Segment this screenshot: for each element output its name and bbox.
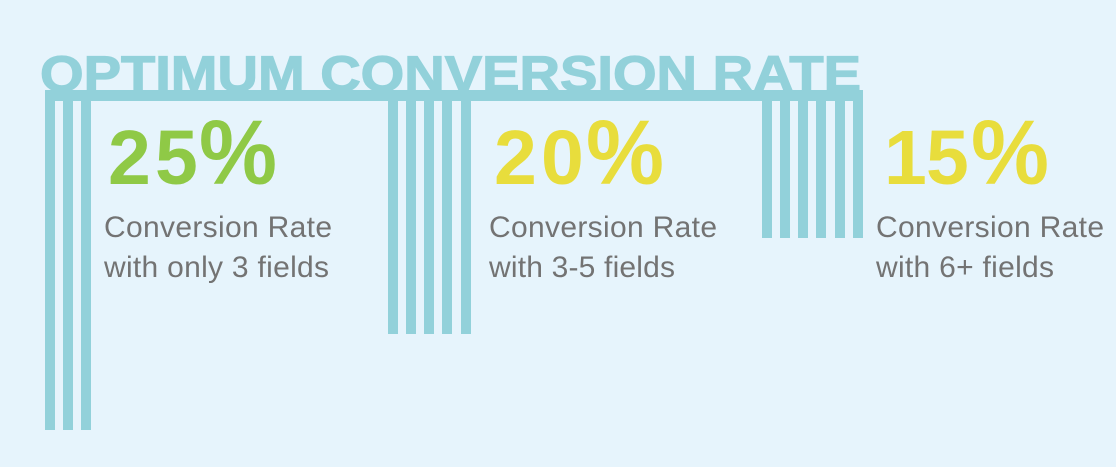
caption: 6+ fields [875, 211, 1104, 284]
bars: 3 fields [45, 100, 91, 430]
stat: 15%: % [971, 102, 1049, 204]
caption: 6+ fields: Conversion Rate [876, 211, 1104, 244]
caption: 6+ fields: with 6+ fields [875, 251, 1054, 284]
caption: 3 fields: with only 3 fields [103, 251, 329, 284]
stat: 25%: % [199, 102, 277, 204]
stat: 25%: 25 [108, 115, 198, 201]
caption: 3-5 fields [488, 211, 717, 284]
stat: 15% [884, 102, 1049, 204]
stat: 20%: 20 [494, 115, 584, 201]
caption: 3 fields: Conversion Rate [104, 211, 332, 244]
stat: 20% [494, 102, 664, 204]
stat: 20%: % [586, 102, 664, 204]
caption: 3 fields [103, 211, 332, 284]
stat: 25% [108, 102, 277, 204]
title: OPTIMUM CONVERSION RATE [40, 46, 861, 102]
bars: 6+ fields [762, 100, 863, 238]
stat: 15%: 15 [884, 115, 969, 201]
caption: 3-5 fields: Conversion Rate [489, 211, 717, 244]
caption: 3-5 fields: with 3-5 fields [488, 251, 675, 284]
bars: 3-5 fields [388, 100, 471, 334]
header bar [45, 90, 863, 101]
